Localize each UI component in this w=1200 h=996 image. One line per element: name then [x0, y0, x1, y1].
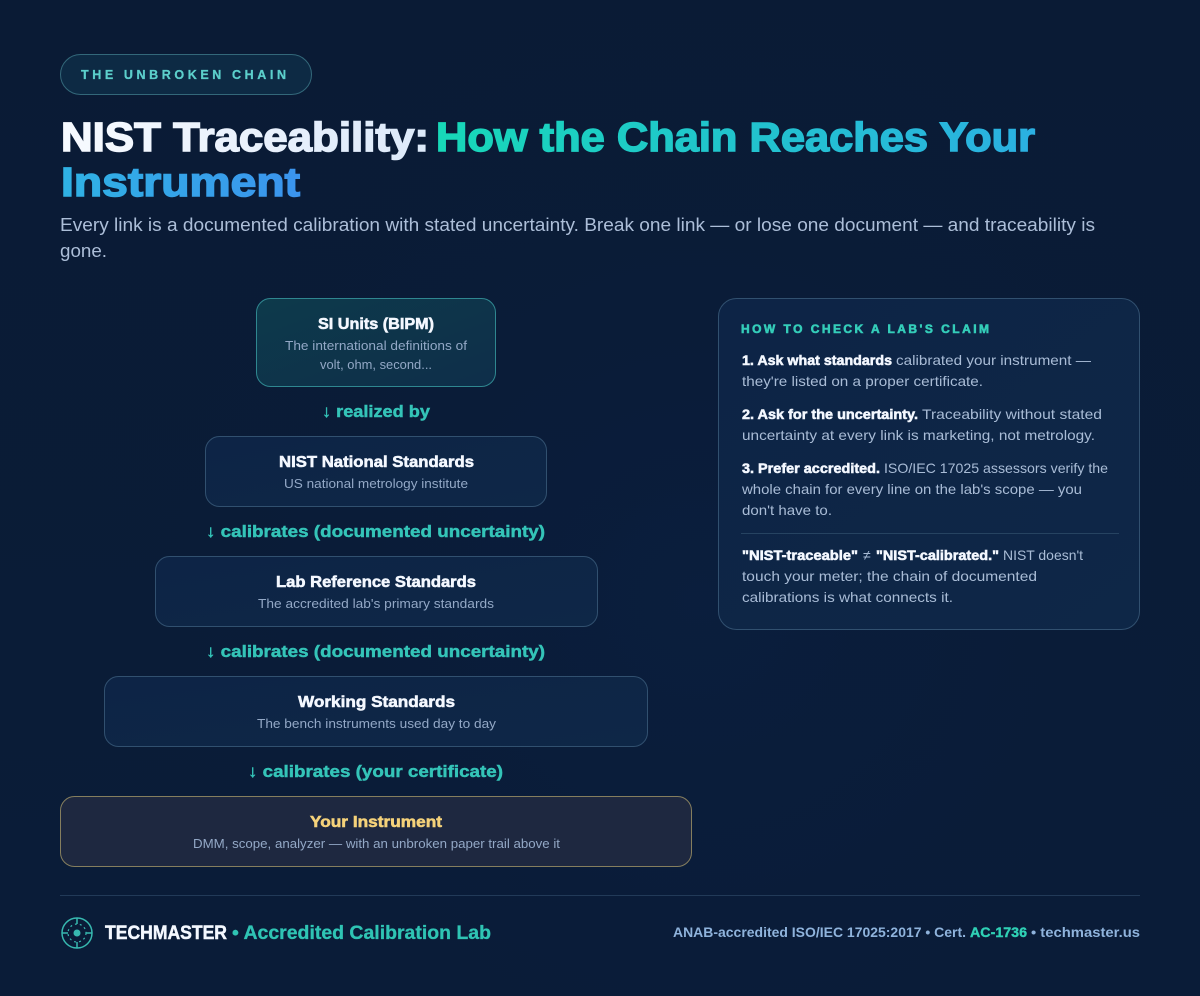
card: NIST National Standards	[206, 436, 546, 506]
step 2: uncertainty at every link is marketing, not metrology.	[742, 427, 1095, 443]
step 2	[742, 406, 1102, 443]
footer credentials	[673, 925, 1140, 940]
icon: calibration target logo	[62, 918, 92, 948]
subtitle: Every link is a documented calibration with stated uncertainty. Break one link — or lose one document — and traceability is	[60, 215, 1095, 235]
footer credentials: AC-1736	[970, 925, 1028, 940]
card: Your Instrument	[60, 796, 692, 866]
subtitle	[60, 215, 1095, 261]
footer brand: TECHMASTER	[105, 923, 227, 944]
arrow: calibrates your certificate: ↓ calibrates (your certificate)	[248, 762, 503, 781]
note: traceable vs calibrated: "NIST-calibrated."	[876, 547, 999, 563]
badge: the unbroken chain: THE UNBROKEN CHAIN	[81, 68, 286, 82]
card: SI Units: volt, ohm, second...	[320, 358, 432, 372]
arrow: calibrates documented uncertainty: ↓ calibrates (documented uncertainty)	[206, 522, 545, 541]
card: Working Standards	[104, 676, 648, 746]
step 1: they're listed on a proper certificate.	[742, 373, 983, 389]
step 3	[741, 460, 1108, 518]
note: traceable vs calibrated: NIST doesn't	[1003, 547, 1083, 563]
card: Working Standards: Working Standards	[298, 694, 455, 711]
card: SI Units	[256, 298, 496, 386]
badge: the unbroken chain	[60, 54, 312, 94]
card: Your Instrument: DMM, scope, analyzer — with an unbroken paper trail above it	[193, 837, 561, 851]
title: How the Chain Reaches Your	[436, 114, 1035, 160]
step 3: whole chain for every line on the lab's scope — you	[741, 481, 1082, 497]
card: Lab Reference Standards	[156, 556, 598, 626]
step 2: Traceability without stated	[922, 406, 1102, 422]
note: traceable vs calibrated: ≠	[863, 547, 871, 563]
arrow: calibrates documented uncertainty: ↓ calibrates (documented uncertainty)	[206, 642, 545, 661]
subtitle: gone.	[60, 241, 107, 261]
step 3: ISO/IEC 17025 assessors verify the	[884, 460, 1108, 476]
step 1	[742, 352, 1091, 389]
footer credentials: ANAB-accredited ISO/IEC 17025:2017 • Cert.	[673, 925, 966, 940]
card: Working Standards: The bench instruments used day to day	[257, 717, 497, 731]
title: NIST Traceability:	[61, 114, 429, 160]
note: traceable vs calibrated: calibrations is what connects it.	[742, 589, 953, 605]
card: NIST National Standards: US national metrology institute	[284, 477, 468, 491]
card: NIST National Standards: NIST National Standards	[279, 454, 474, 471]
footer brand	[105, 923, 491, 944]
card: SI Units: SI Units (BIPM)	[318, 316, 434, 333]
card: Lab Reference Standards: Lab Reference Standards	[276, 574, 476, 591]
panel heading: HOW TO CHECK A LAB'S CLAIM	[741, 322, 989, 336]
step 1: calibrated your instrument —	[896, 352, 1091, 368]
footer credentials: • techmaster.us	[1031, 925, 1140, 940]
step 1: 1. Ask what standards	[742, 352, 892, 368]
panel: how to check a lab's claim	[718, 298, 1140, 630]
arrow: realized by: ↓ realized by	[322, 402, 431, 421]
step 3: 3. Prefer accredited.	[742, 460, 880, 476]
card: Your Instrument: Your Instrument	[310, 814, 442, 831]
title: Instrument	[61, 159, 300, 205]
card: Lab Reference Standards: The accredited lab's primary standards	[258, 597, 494, 611]
note: traceable vs calibrated: "NIST-traceable"	[742, 547, 858, 563]
card: SI Units: The international definitions of	[285, 339, 468, 353]
title	[61, 114, 1035, 205]
footer brand: • Accredited Calibration Lab	[232, 923, 491, 944]
step 3: don't have to.	[742, 502, 832, 518]
chain diagram	[60, 298, 692, 866]
note: traceable vs calibrated	[742, 547, 1083, 605]
note: traceable vs calibrated: touch your meter; the chain of documented	[742, 568, 1037, 584]
footer	[62, 918, 1140, 948]
step 2: 2. Ask for the uncertainty.	[742, 406, 918, 422]
